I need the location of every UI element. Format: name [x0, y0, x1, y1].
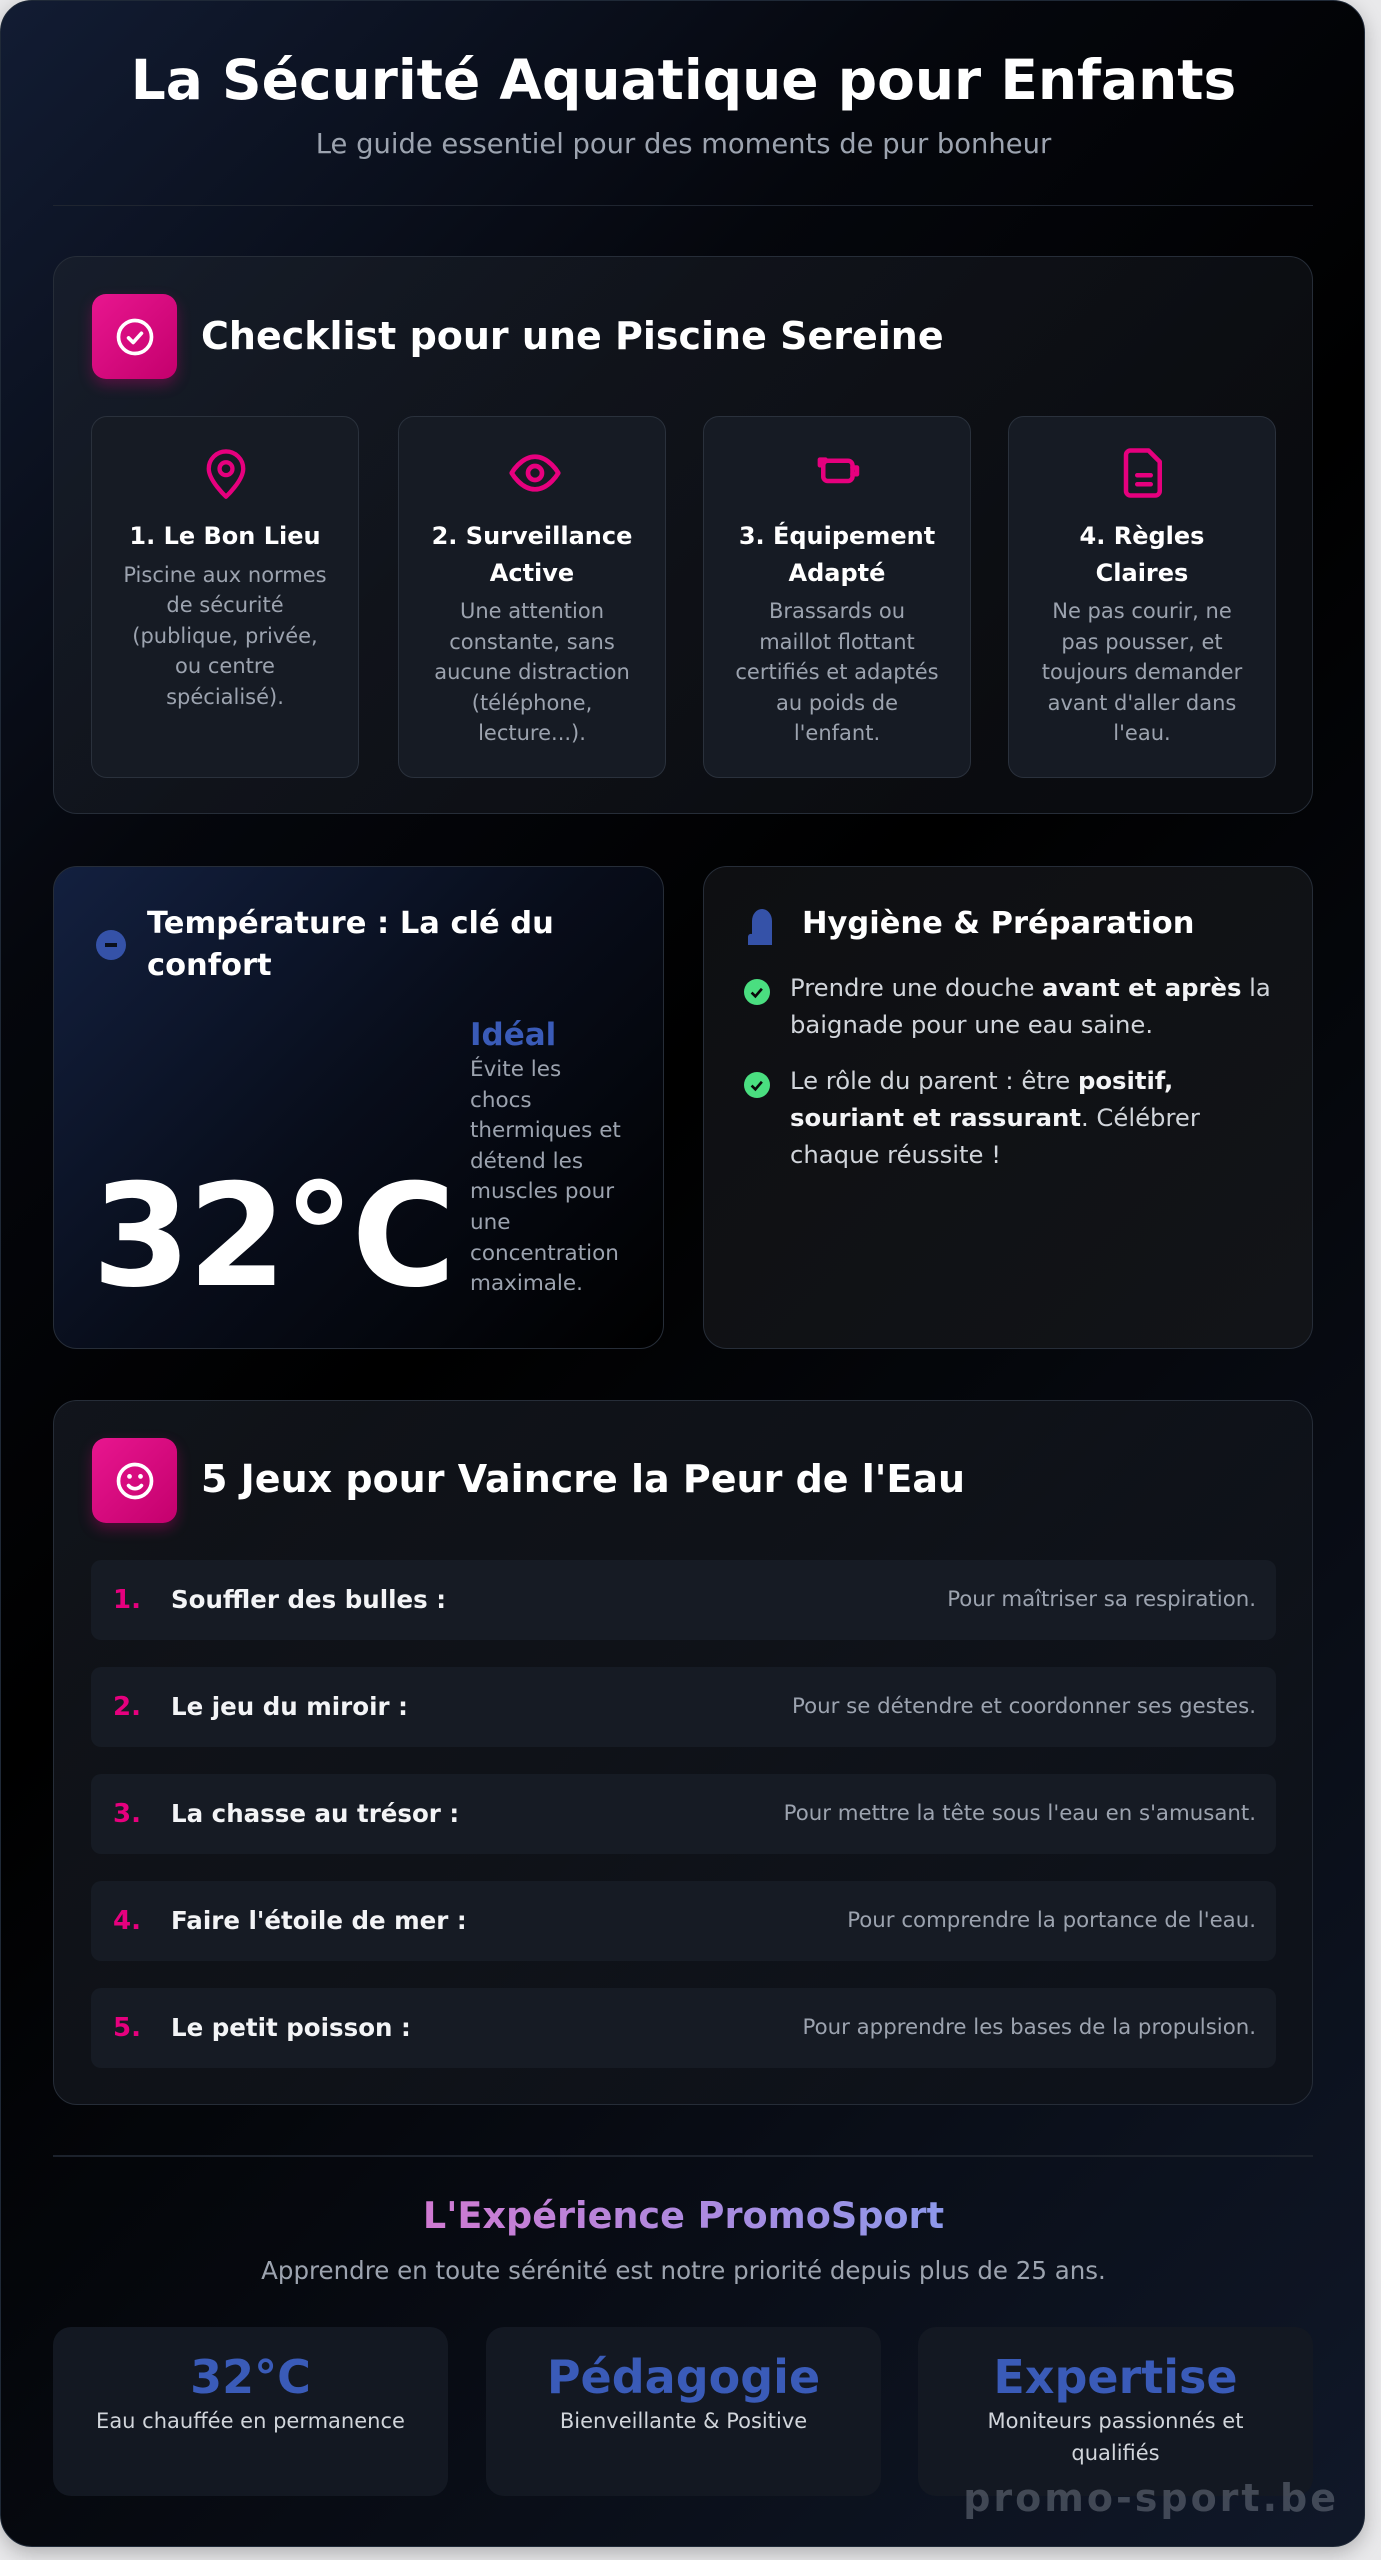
- card: surveillance: [398, 416, 666, 778]
- game 4: Faire l'étoile de mer :: [171, 1906, 467, 1935]
- text: ideal: Idéal: [470, 1017, 556, 1053]
- subtitle: Le guide essentiel pour des moments de pur bonheur: [316, 129, 1051, 160]
- game 5: Le petit poisson :: [171, 2013, 411, 2042]
- panel: hygiene: [703, 866, 1313, 1349]
- card: regles: Ne pas courir, ne pas pousser, et toujours demander avant d'aller dans l'eau.: [1042, 599, 1242, 745]
- game 3: La chasse au trésor :: [171, 1799, 459, 1828]
- icon: smile: [92, 1438, 177, 1523]
- big number: 32°C: [92, 1154, 453, 1319]
- game 1: [91, 1560, 1276, 1640]
- game 3: Pour mettre la tête sous l'eau en s'amusant.: [784, 1801, 1256, 1826]
- item 1: Prendre une douche avant et après la baignade pour une eau saine.: [790, 973, 1271, 1039]
- heading: hygiene: Hygiène & Préparation: [802, 906, 1194, 941]
- heading: temperature: Température : La clé du confort: [147, 906, 554, 983]
- game 1: 1.: [113, 1585, 141, 1615]
- game 4: Pour comprendre la portance de l'eau.: [847, 1908, 1256, 1933]
- watermark: promo-sport.be: [963, 2476, 1339, 2520]
- card: surveillance: Une attention constante, sans aucune distraction (téléphone, lecture...).: [434, 599, 630, 745]
- stat: 32C: 32°C: [190, 2350, 311, 2404]
- stat: expertise: Moniteurs passionnés et qualifiés: [988, 2409, 1243, 2465]
- card: equipement: Brassards ou: [769, 599, 905, 623]
- stat: pedagogie: Bienveillante & Positive: [560, 2409, 807, 2433]
- heading: checklist: Checklist pour une Piscine Sereine: [201, 314, 944, 358]
- stat: 32C: [53, 2327, 448, 2496]
- card: bon lieu: Piscine aux normes de sécurité (publique, privée, ou centre spécialisé).: [123, 562, 327, 708]
- panel: temperature: [53, 866, 664, 1349]
- card: bon lieu: 1. Le Bon Lieu: [129, 522, 321, 550]
- game 4: 4.: [113, 1906, 141, 1936]
- heading: experience: L'Expérience PromoSport: [423, 2194, 944, 2237]
- game 2: Pour se détendre et coordonner ses gestes.: [792, 1694, 1256, 1719]
- stat: 32C: Eau chauffée en permanence: [96, 2409, 405, 2433]
- heading: games: 5 Jeux pour Vaincre la Peur de l'Eau: [201, 1457, 965, 1501]
- panel: games: [53, 1400, 1313, 2105]
- card: regles: 4. Règles Claires: [1080, 522, 1204, 586]
- icon: thermometer dot: [96, 930, 126, 960]
- card: equipement: [703, 416, 971, 778]
- stat: pedagogie: Pédagogie: [547, 2350, 820, 2404]
- game 5: Pour apprendre les bases de la propulsion.: [802, 2015, 1256, 2040]
- item 2: Le rôle du parent : être positif, souriant et rassurant. Célébrer chaque réussite !: [790, 1066, 1200, 1169]
- stat: pedagogie: [486, 2327, 881, 2496]
- stat: expertise: Expertise: [993, 2350, 1238, 2404]
- stat: expertise: [918, 2327, 1313, 2496]
- game 3: [91, 1774, 1276, 1854]
- icon: person: [748, 909, 772, 945]
- text: ideal: Évite les chocs thermiques et détend les muscles pour une concentration maximale.: [470, 1057, 621, 1296]
- card: surveillance: 2. Surveillance Active: [432, 522, 632, 586]
- game 5: [91, 1988, 1276, 2068]
- game 3: 3.: [113, 1799, 141, 1829]
- game 2: Le jeu du miroir :: [171, 1692, 408, 1721]
- game 2: [91, 1667, 1276, 1747]
- panel: checklist: [53, 256, 1313, 814]
- icon: check circle: [92, 294, 177, 379]
- game 2: 2.: [113, 1692, 141, 1722]
- card: regles: [1008, 416, 1276, 778]
- card: equipement: 3. Équipement Adapté: [739, 522, 935, 586]
- card: bon lieu: [91, 416, 359, 778]
- subtitle: experience: Apprendre en toute sérénité est notre priorité depuis plus de 25 ans.: [261, 2256, 1106, 2285]
- game 1: Souffler des bulles :: [171, 1585, 446, 1614]
- game 4: [91, 1881, 1276, 1961]
- game 5: 5.: [113, 2013, 141, 2043]
- game 1: Pour maîtriser sa respiration.: [947, 1587, 1256, 1612]
- card: equipement: maillot flottant certifiés et adaptés au poids de l'enfant.: [735, 630, 939, 745]
- title: La Sécurité Aquatique pour Enfants: [131, 48, 1236, 112]
